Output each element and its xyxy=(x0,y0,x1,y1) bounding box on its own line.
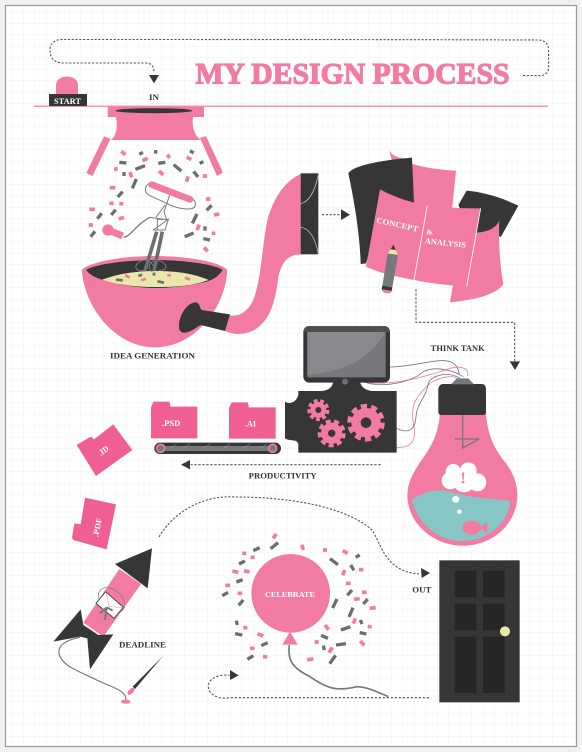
funnel hopper xyxy=(86,107,223,176)
dashed arrow: rocket to door xyxy=(159,497,430,578)
open map xyxy=(366,189,481,287)
panel: celebrate balloon xyxy=(208,534,429,698)
back sheet pink right xyxy=(450,220,503,302)
rocket body xyxy=(83,569,141,637)
open map: ANALYSIS xyxy=(424,236,467,250)
folder: ai: .AI xyxy=(245,420,256,429)
rocket fins xyxy=(53,609,113,669)
delivery pipe xyxy=(225,174,301,334)
folder: psd xyxy=(151,402,197,438)
dashed arrow: start to in xyxy=(50,40,549,83)
back sheet pink xyxy=(388,147,456,213)
conveyor belt xyxy=(154,443,281,454)
back sheet dark left xyxy=(348,158,414,264)
machine body xyxy=(285,382,397,453)
bulb glass xyxy=(407,413,517,546)
balloon string xyxy=(289,645,388,697)
panel: concept and analysis xyxy=(348,147,520,370)
start button: START xyxy=(54,97,82,106)
folder: pdf: .PDF xyxy=(91,517,104,538)
small gear xyxy=(309,401,328,419)
balloon xyxy=(251,554,330,633)
label: in: IN xyxy=(149,93,159,102)
balloon label: CELEBRATE xyxy=(265,590,315,599)
fish xyxy=(462,521,487,535)
batter xyxy=(102,271,209,287)
pipe flange xyxy=(301,173,318,254)
title: MY DESIGN PROCESS xyxy=(196,57,510,90)
label: think tank: THINK TANK xyxy=(431,344,486,353)
envelope xyxy=(94,583,130,620)
thought cloud xyxy=(442,462,486,492)
filament xyxy=(455,415,479,448)
falling confetti xyxy=(89,150,219,251)
mixer xyxy=(102,183,195,272)
balloon knot xyxy=(282,632,298,645)
paint brush xyxy=(126,656,163,696)
label: productivity: PRODUCTIVITY xyxy=(249,472,317,481)
label: idea generation: IDEA GENERATION xyxy=(110,352,195,361)
back sheet dark right xyxy=(458,191,518,237)
folder: id: .ID xyxy=(97,444,111,458)
bulb cap xyxy=(451,378,474,384)
panel: think tank machine xyxy=(77,326,397,476)
open map: CONCEPT xyxy=(376,216,420,234)
dashed arrow: pipe to concept xyxy=(322,209,350,220)
dashed arrow: concept to think tank xyxy=(416,289,520,370)
folder: id xyxy=(77,424,132,476)
batter confetti xyxy=(116,273,190,283)
open map: & xyxy=(426,228,433,237)
bowl interior xyxy=(86,260,223,288)
bubbles xyxy=(452,496,462,514)
panel: deadline rocket xyxy=(53,498,163,704)
paint blot xyxy=(121,700,130,704)
folder: psd: .PSD xyxy=(162,419,181,428)
label: out: OUT xyxy=(412,586,432,595)
folder: ai xyxy=(229,402,276,439)
monitor xyxy=(303,326,390,385)
dashed arrow: productivity xyxy=(181,460,381,469)
rocket nose xyxy=(115,548,152,588)
dashed arrow: balloon loop xyxy=(208,670,429,698)
top divider line xyxy=(34,106,548,107)
balloon confetti xyxy=(222,534,376,664)
medium gear xyxy=(320,421,344,445)
bowl xyxy=(82,256,227,347)
label: deadline: DEADLINE xyxy=(119,640,166,649)
bulb base xyxy=(438,384,486,415)
start button xyxy=(49,77,87,106)
pipe nozzle xyxy=(179,302,230,333)
door xyxy=(439,560,520,702)
large gear xyxy=(350,406,382,439)
panel: idea generation xyxy=(82,150,318,347)
folder: pdf xyxy=(72,498,116,549)
pencil xyxy=(382,245,398,293)
water xyxy=(412,490,510,541)
thought cloud: ! xyxy=(460,468,466,487)
wires xyxy=(360,361,468,447)
fuse xyxy=(59,637,126,700)
light bulb tank xyxy=(407,378,517,546)
